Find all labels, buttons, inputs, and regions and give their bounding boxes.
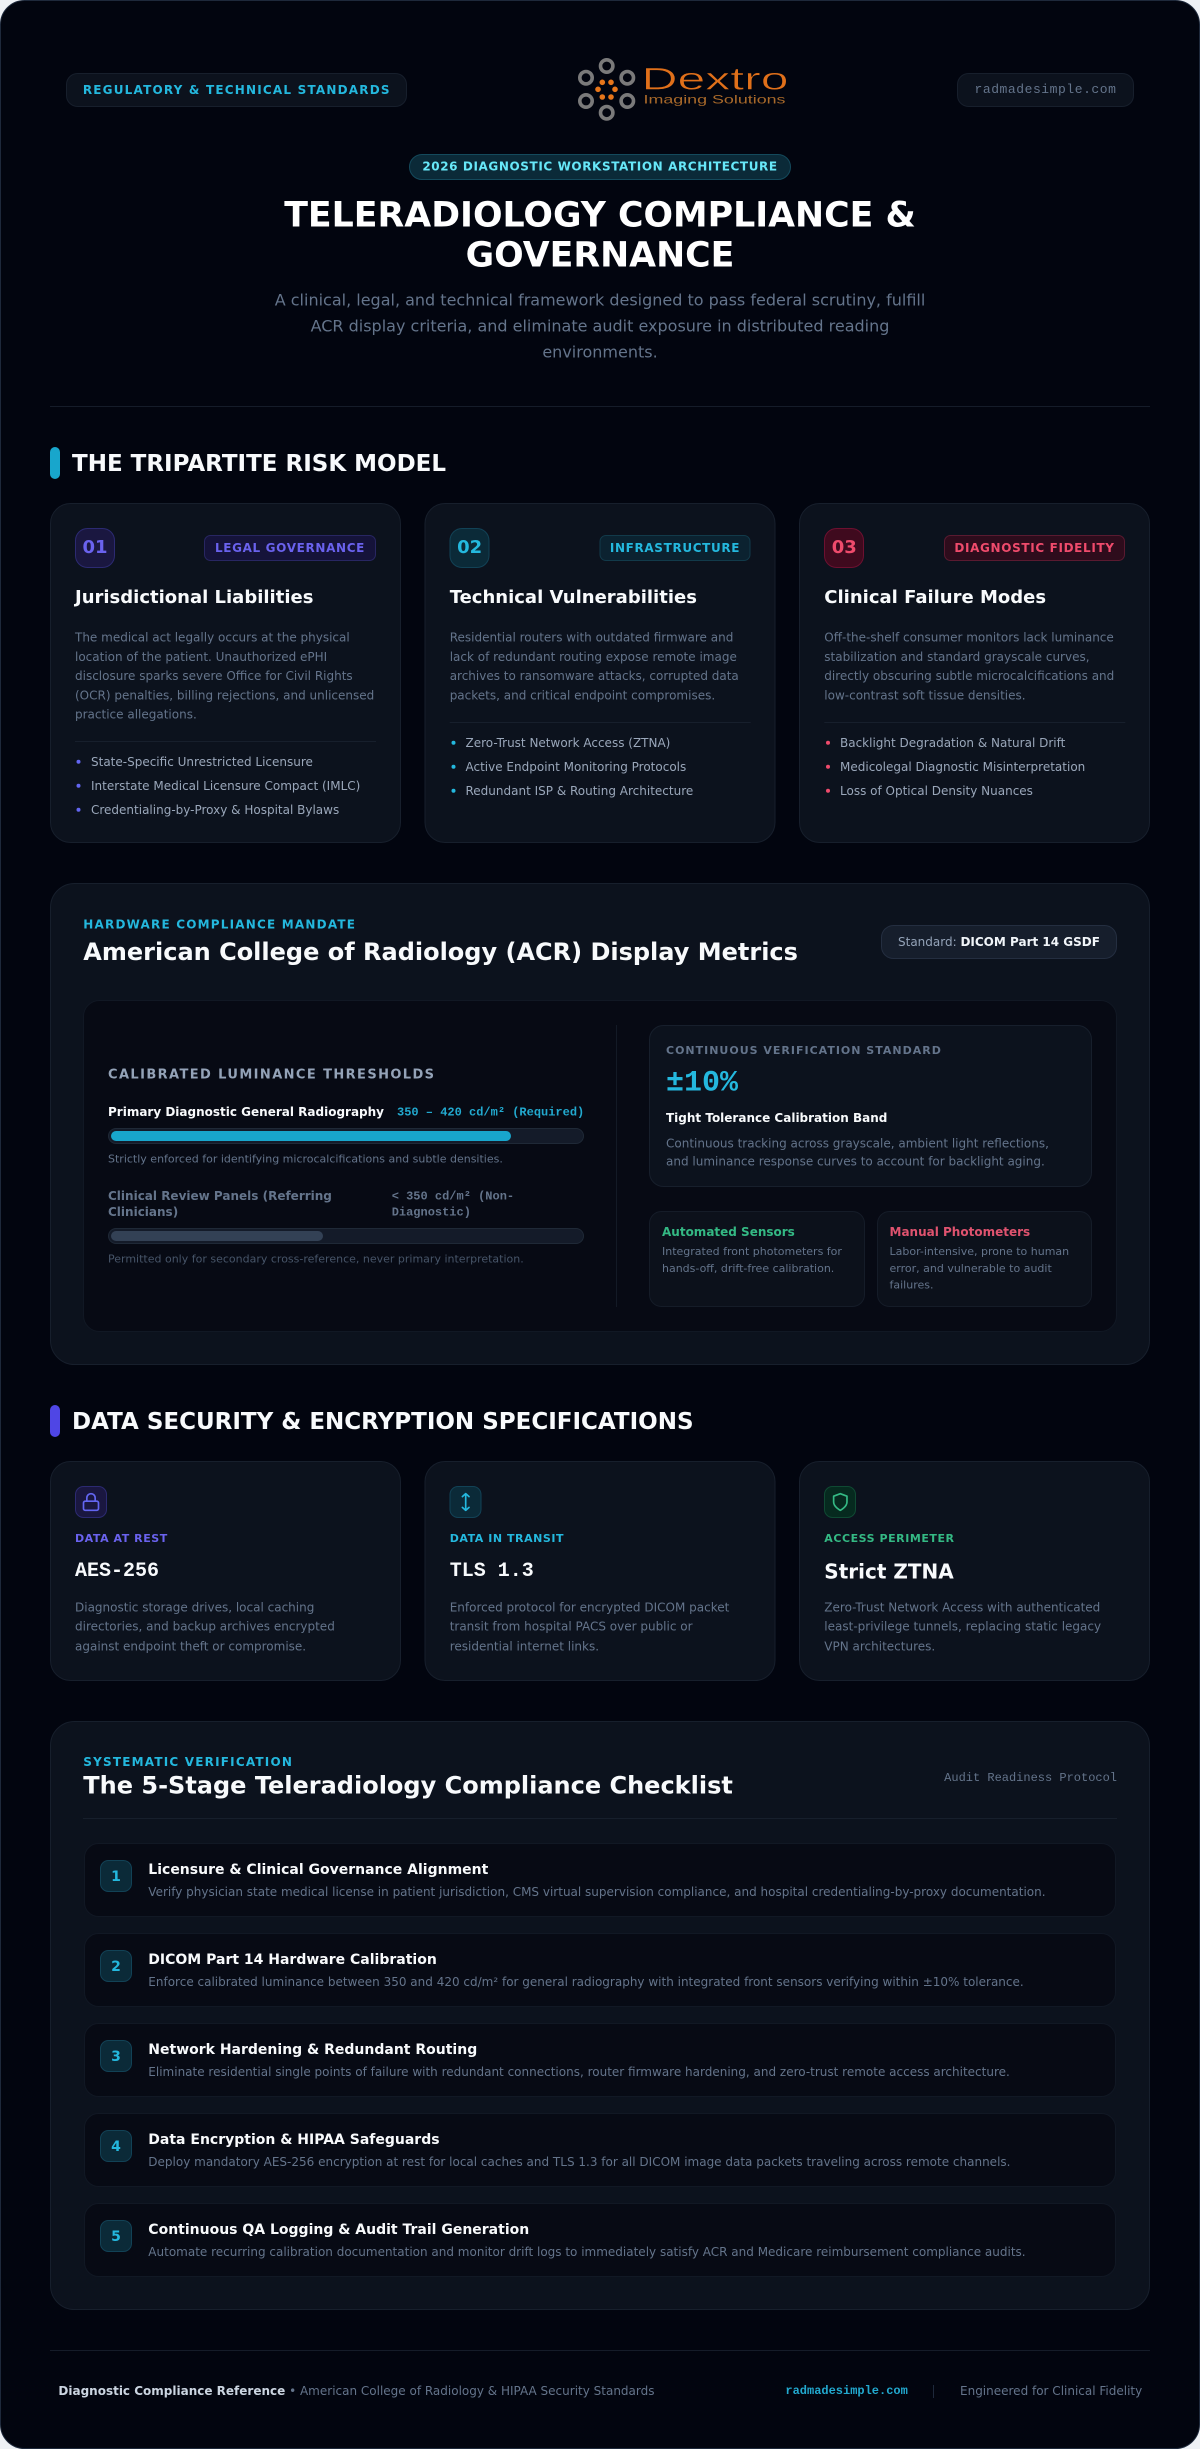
description: low-contrast soft tissue densities.: [824, 688, 1026, 702]
number badge 03: [824, 528, 864, 568]
hero: [275, 154, 925, 362]
clinical review row: Clinical Review Panels (Referring: [108, 1189, 332, 1203]
step 5: [84, 2204, 1116, 2276]
manual photometers card: error, and vulnerable to audit: [890, 1262, 1052, 1275]
number badge 02: 02: [457, 537, 482, 558]
panel: access perimeter: [800, 1462, 1150, 1680]
tolerance card: CONTINUOUS VERIFICATION STANDARD: [666, 1044, 942, 1057]
heading: tripartite risk model: THE TRIPARTITE RISK MODEL: [72, 451, 446, 477]
step 2: 2: [111, 1959, 121, 1975]
bullet list: Medicolegal Diagnostic Misinterpretation: [840, 760, 1085, 774]
step 2: DICOM Part 14 Hardware Calibration: [148, 1952, 437, 1968]
bullet list: [452, 736, 693, 798]
bullet list: State-Specific Unrestricted Licensure: [91, 755, 313, 769]
panel: jurisdictional liabilities: [50, 504, 400, 842]
regulatory pill: REGULATORY & TECHNICAL STANDARDS: [83, 83, 391, 97]
panel: data at rest: against endpoint theft or compromise.: [75, 1640, 306, 1654]
description: disclosure sparks severe Office for Civil Rights: [75, 669, 353, 683]
panel: data in transit: TLS 1.3: [450, 1560, 534, 1583]
primary diagnostic row: Strictly enforced for identifying microcalcifications and subtle densities.: [108, 1153, 503, 1166]
footer: Engineered for Clinical Fidelity: [960, 2384, 1142, 2398]
tolerance card: Tight Tolerance Calibration Band: [666, 1111, 887, 1125]
luminance thresholds chart: [108, 1068, 584, 1266]
panel: data at rest: AES-256: [75, 1560, 159, 1583]
bullet list: Loss of Optical Density Nuances: [840, 784, 1033, 798]
panel: data at rest: Diagnostic storage drives, local caching: [75, 1600, 314, 1614]
panel: data in transit: residential internet links.: [450, 1640, 599, 1654]
clinical review row: Clinicians): [108, 1205, 178, 1219]
regulatory pill: [66, 74, 406, 106]
clinical review row: Permitted only for secondary cross-reference, never primary interpretation.: [108, 1253, 524, 1266]
card title: Technical Vulnerabilities: [450, 587, 697, 608]
number badge 03: 03: [832, 537, 857, 558]
tag: infrastructure: INFRASTRUCTURE: [610, 541, 740, 555]
panel: data at rest: DATA AT REST: [75, 1532, 168, 1545]
bullet list: [826, 736, 1085, 798]
automated sensors card: [650, 1212, 864, 1306]
bullet list: [76, 755, 360, 817]
clinical review row: < 350 cd/m² (Non-: [392, 1190, 514, 1204]
panel: data in transit: Enforced protocol for encrypted DICOM packet: [450, 1600, 730, 1614]
step 1: 1: [111, 1869, 121, 1885]
header bar: [66, 60, 1134, 119]
card title: Jurisdictional Liabilities: [73, 587, 313, 608]
panel: technical vulnerabilities: [425, 504, 775, 842]
logo: Dextro Imaging Solutions: Dextro: [642, 60, 788, 96]
bullet list: Zero-Trust Network Access (ZTNA): [466, 736, 670, 750]
description: (OCR) penalties, billing rejections, and unlicensed: [75, 688, 374, 702]
step 4: Data Encryption & HIPAA Safeguards: [148, 2132, 440, 2148]
manual photometers card: failures.: [890, 1278, 933, 1291]
description: lack of redundant routing expose remote image: [450, 650, 737, 664]
bullet list: Redundant ISP & Routing Architecture: [466, 784, 693, 798]
icon: shield: [824, 1486, 856, 1518]
hero badge: [410, 154, 790, 180]
tag: legal governance: [204, 536, 376, 560]
description: stabilization and standard grayscale curves,: [824, 650, 1090, 664]
primary diagnostic row: 350 – 420 cd/m² (Required): [397, 1106, 584, 1120]
step 3: [84, 2024, 1116, 2096]
panel: data in transit: [425, 1462, 775, 1680]
step 4: [84, 2114, 1116, 2186]
description: packets, and critical endpoint compromises.: [450, 688, 715, 702]
automated sensors card: Automated Sensors: [662, 1225, 795, 1239]
clinical review row: [108, 1189, 584, 1266]
icon: lock: [76, 1486, 106, 1518]
manual photometers card: Labor-intensive, prone to human: [890, 1245, 1069, 1258]
panel: clinical failure modes: [800, 504, 1150, 842]
step 4: 4: [111, 2139, 121, 2155]
protocol label: Audit Readiness Protocol: [944, 1771, 1117, 1785]
footer: [58, 2384, 1142, 2398]
bullet list: Credentialing-by-Proxy & Hospital Bylaws: [91, 803, 339, 817]
tolerance card: and luminance response curves to account for backlight aging.: [666, 1154, 1045, 1168]
automated sensors card: Integrated front photometers for: [662, 1245, 842, 1258]
description: Off-the-shelf consumer monitors lack luminance: [824, 631, 1114, 645]
logo: Dextro Imaging Solutions: Imaging Solutions: [644, 92, 786, 106]
eyebrow: SYSTEMATIC VERIFICATION: [83, 1755, 293, 1769]
step 1: Verify physician state medical license in patient jurisdiction, CMS virtual supervision compliance, and hospital credentialing-by-proxy documentation.: [148, 1885, 1046, 1899]
logo: Dextro Imaging Solutions: [580, 60, 788, 119]
clinical review row: Diagnostic): [392, 1206, 471, 1220]
tag: diagnostic fidelity: [944, 536, 1124, 560]
step 5: 5: [111, 2229, 121, 2245]
description: Residential routers with outdated firmware and: [450, 631, 733, 645]
number badge 01: 01: [82, 537, 108, 558]
step 2: Enforce calibrated luminance between 350 and 420 cd/m² for general radiography with integrated front sensors verifying within ±10% tolerance.: [148, 1975, 1024, 1989]
standard pill: [882, 926, 1116, 958]
panel: data at rest: [50, 1462, 400, 1680]
subtitle: A clinical, legal, and technical framework designed to pass federal scrutiny, fulfill: [275, 291, 925, 310]
bullet list: Interstate Medical Licensure Compact (IMLC): [91, 779, 360, 793]
description: location of the patient. Unauthorized ePHI: [75, 650, 327, 664]
panel: access perimeter: ACCESS PERIMETER: [824, 1532, 955, 1545]
step 2: [84, 1934, 1116, 2006]
subtitle: ACR display criteria, and eliminate audit exposure in distributed reading: [311, 317, 889, 336]
automated sensors card: hands-off, drift-free calibration.: [662, 1262, 834, 1275]
standard pill: Standard: DICOM Part 14 GSDF: [898, 935, 1100, 949]
bullet list: Backlight Degradation & Natural Drift: [840, 736, 1066, 750]
website pill: radmadesimple.com: [975, 82, 1116, 97]
panel: data at rest: directories, and backup archives encrypted: [75, 1620, 335, 1634]
footer: radmadesimple.com: [785, 2384, 908, 2398]
hero badge: 2026 DIAGNOSTIC WORKSTATION ARCHITECTURE: [422, 160, 778, 174]
tag: diagnostic fidelity: DIAGNOSTIC FIDELITY: [954, 541, 1115, 555]
primary diagnostic row: Primary Diagnostic General Radiography: [108, 1105, 384, 1119]
panel: access perimeter: Zero-Trust Network Access with authenticated: [824, 1600, 1100, 1614]
panel: data in transit: DATA IN TRANSIT: [450, 1532, 564, 1545]
main title: GOVERNANCE: [466, 236, 734, 276]
step 1: [84, 1844, 1116, 1916]
panel: ACR display metrics: [50, 884, 1150, 1364]
heading: data security: DATA SECURITY & ENCRYPTION SPECIFICATIONS: [72, 1409, 694, 1435]
panel title: American College of Radiology (ACR) Display Metrics: [83, 938, 798, 966]
main title: TELERADIOLOGY COMPLIANCE &: [284, 196, 916, 236]
manual photometers card: [878, 1212, 1092, 1306]
tag: legal governance: LEGAL GOVERNANCE: [215, 541, 365, 555]
tolerance card: [650, 1026, 1092, 1186]
step 1: Licensure & Clinical Governance Alignment: [148, 1862, 489, 1878]
panel: access perimeter: Strict ZTNA: [824, 1560, 954, 1584]
icon: transit arrows: [450, 1486, 481, 1518]
footer: Diagnostic Compliance Reference • American College of Radiology & HIPAA Security Standards: [58, 2384, 655, 2398]
step 5: Automate recurring calibration documentation and monitor drift logs to immediately satisfy ACR and Medicare reimbursement compliance audits.: [148, 2245, 1026, 2259]
panel: compliance checklist: [50, 1722, 1150, 2310]
step 4: Deploy mandatory AES-256 encryption at rest for local caches and TLS 1.3 for all DICOM image data packets traveling across remote channels.: [148, 2155, 1010, 2169]
step 3: Eliminate residential single points of failure with redundant connections, router firmware hardening, and zero-trust remote access architecture.: [148, 2065, 1010, 2079]
description: directly obscuring subtle microcalcifications and: [824, 669, 1114, 683]
number badge 01: [76, 528, 114, 568]
panel: data in transit: transit from hospital PACS over public or: [450, 1620, 693, 1634]
tag: infrastructure: [600, 536, 750, 560]
tolerance card: Continuous tracking across grayscale, ambient light reflections,: [666, 1136, 1049, 1150]
subtitle: environments.: [542, 343, 658, 362]
number badge 02: [450, 528, 489, 568]
panel: access perimeter: VPN architectures.: [824, 1640, 935, 1654]
luminance thresholds chart: CALIBRATED LUMINANCE THRESHOLDS: [108, 1068, 435, 1083]
inner metrics panel: [84, 1000, 1116, 1332]
description: archives to ransomware attacks, corrupted data: [450, 669, 739, 683]
card title: Clinical Failure Modes: [824, 587, 1046, 608]
description: The medical act legally occurs at the physical: [74, 631, 350, 645]
step 3: Network Hardening & Redundant Routing: [148, 2042, 477, 2058]
tolerance card: ±10%: [666, 1067, 739, 1101]
bullet list: Active Endpoint Monitoring Protocols: [466, 760, 686, 774]
manual photometers card: Manual Photometers: [890, 1225, 1030, 1239]
step 5: Continuous QA Logging & Audit Trail Generation: [148, 2222, 529, 2238]
step 3: 3: [111, 2049, 121, 2065]
eyebrow: HARDWARE COMPLIANCE MANDATE: [83, 918, 356, 932]
website pill: [958, 74, 1134, 106]
panel: access perimeter: least-privilege tunnels, replacing static legacy: [824, 1620, 1101, 1634]
primary diagnostic row: [108, 1105, 584, 1166]
panel title: The 5-Stage Teleradiology Compliance Checklist: [83, 1771, 733, 1799]
description: practice allegations.: [75, 708, 197, 722]
